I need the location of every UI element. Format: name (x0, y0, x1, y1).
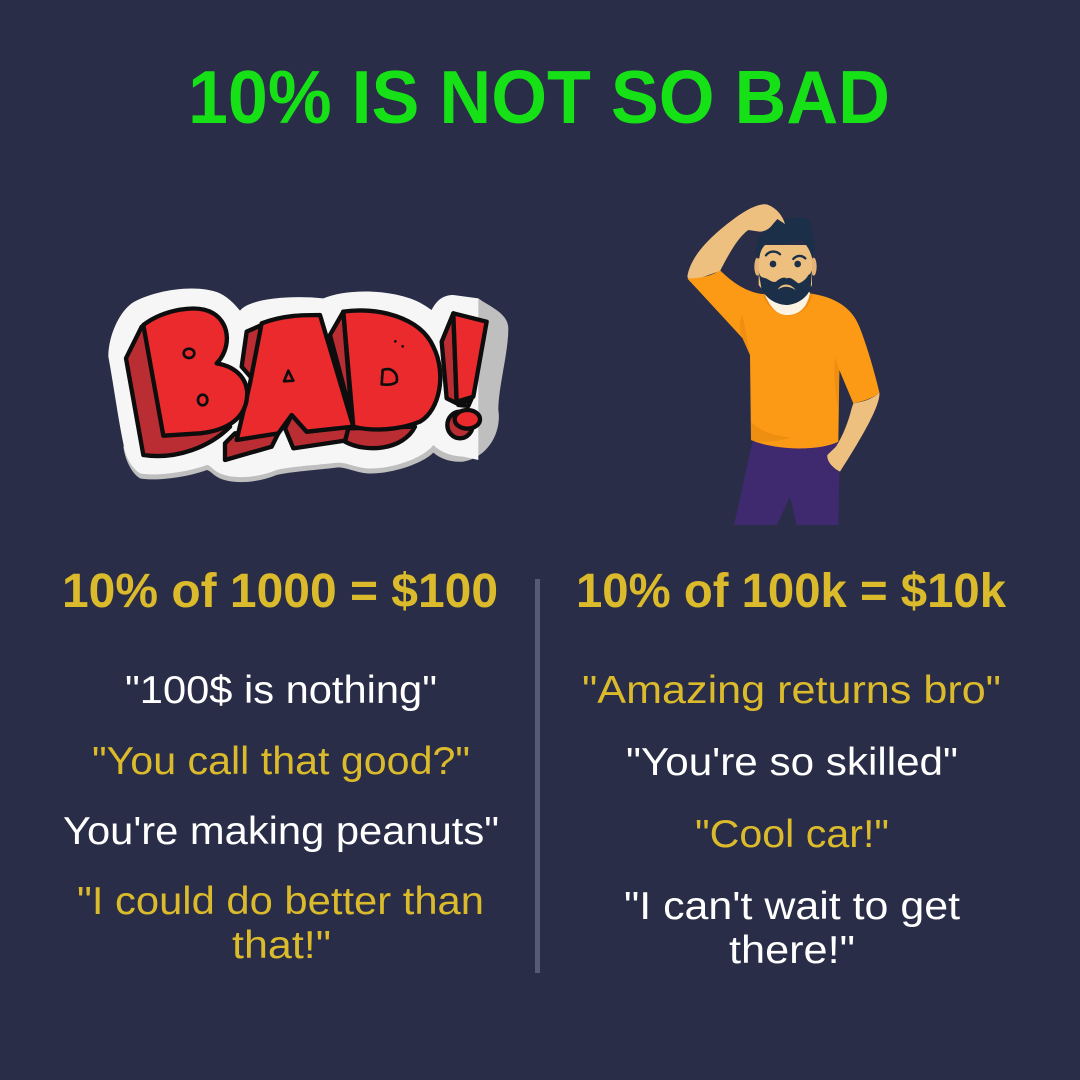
right quotes: "Amazing returns bro" (582, 669, 1001, 712)
upper sleeve (687, 270, 728, 295)
left quotes: "I could do better than (77, 880, 484, 923)
right quotes: "Cool car!" (695, 813, 889, 856)
left quotes: "100$ is nothing" (125, 669, 437, 712)
collar (765, 285, 810, 315)
right quotes: there!" (729, 929, 855, 972)
forearm (827, 392, 879, 472)
right quotes: "You're so skilled" (626, 741, 958, 784)
trousers (734, 441, 839, 525)
shirt (687, 270, 879, 448)
raised arm (687, 204, 785, 282)
right quotes: "I can't wait to get (624, 885, 960, 928)
icon: BAD! sticker (108, 289, 508, 482)
head (754, 218, 817, 305)
right column heading: 10% of 100k = $10k (576, 565, 1006, 618)
left quotes: You're making peanuts" (63, 810, 499, 853)
left column heading: 10% of 1000 = $100 (62, 565, 498, 618)
left quotes (63, 669, 499, 967)
title: 10% IS NOT SO BAD (188, 55, 890, 139)
left quotes: "You call that good?" (92, 740, 470, 783)
centre divider (535, 579, 540, 973)
left quotes: that!" (232, 924, 331, 967)
icon: confused man (687, 204, 879, 525)
right quotes (582, 669, 1001, 972)
